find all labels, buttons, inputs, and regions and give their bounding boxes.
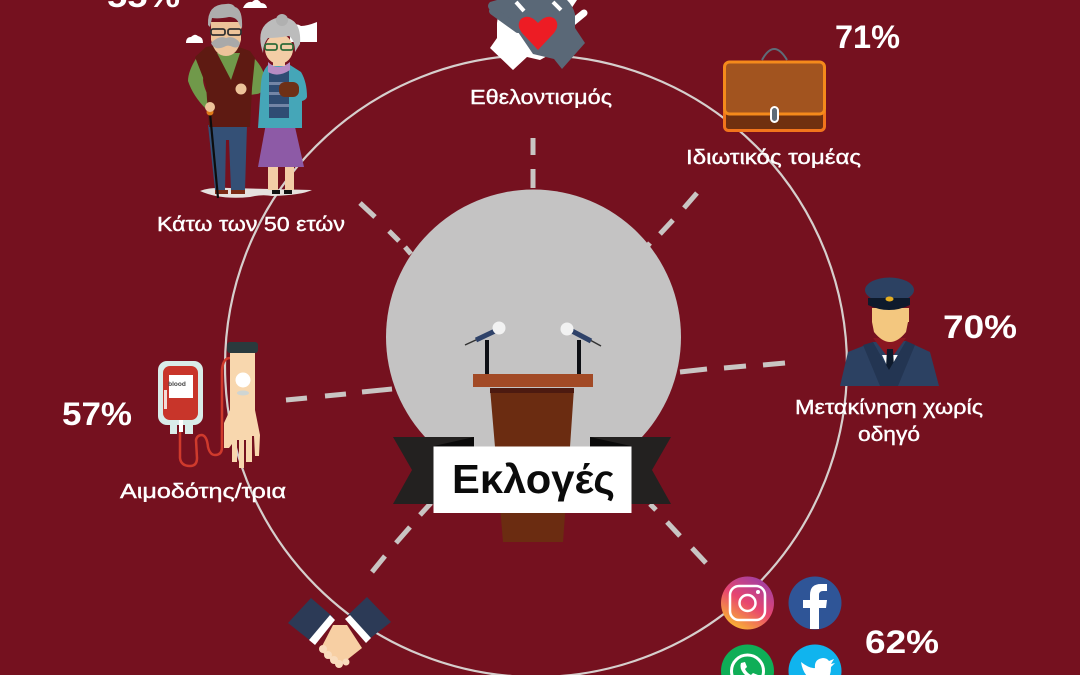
label: Μετακίνηση χωρίς: [795, 397, 983, 419]
icon: right sleeve: [348, 597, 391, 640]
label: Εθελοντισμός: [470, 87, 612, 109]
green arms: [188, 57, 214, 109]
face: [273, 55, 285, 66]
icon: arm: [224, 342, 260, 468]
item: private sector: [686, 19, 900, 169]
percentage: 71%: [835, 19, 900, 55]
right microphone: [560, 322, 601, 374]
label: Αιμοδότης/τρια: [120, 481, 286, 503]
icon: instagram: [721, 576, 774, 630]
icon: briefcase: [724, 49, 824, 130]
title: Εκλογές: [452, 456, 615, 502]
icon: whatsapp: [721, 644, 774, 675]
skirt: [258, 118, 304, 167]
central grey circle: [386, 190, 681, 484]
icon: elderly woman: [258, 14, 307, 194]
cardigan: [258, 65, 307, 128]
icon: heart: [519, 17, 557, 50]
icon: chauffeur: [840, 278, 939, 386]
percentage: 62%: [865, 624, 939, 660]
icon: tube: [180, 358, 245, 466]
item: driverless mobility: [795, 278, 1017, 446]
left microphone: [465, 322, 506, 374]
icon: blood bag: blood: [168, 381, 186, 388]
icon: ground shadow: [200, 188, 312, 198]
icon: white hand: [490, 0, 577, 70]
item: volunteering: [470, 0, 612, 109]
podium with microphones: [465, 322, 601, 542]
spoke dashes: [286, 138, 785, 572]
label: Κάτω των 50 ετών: [157, 214, 345, 236]
icon: left sleeve: [288, 598, 333, 642]
item: under 50: [107, 0, 345, 236]
icon: grey hand: [488, 0, 585, 69]
outer ring: [225, 55, 847, 675]
icon: blood bag: [158, 361, 203, 434]
podium body: [490, 388, 574, 542]
title ribbon: [393, 437, 671, 513]
face: [211, 22, 241, 56]
vest: [195, 44, 255, 127]
label: Ιδιωτικός τομέας: [686, 147, 861, 169]
icon: clouds: [186, 0, 317, 43]
icon: twitter: [788, 644, 842, 675]
item: blood donor: [62, 342, 286, 503]
cane: [210, 113, 218, 198]
item: social media: [721, 576, 939, 675]
podium top: [473, 374, 593, 387]
icon: facebook: [788, 576, 842, 630]
icon: hands: [320, 625, 362, 667]
label: [795, 397, 983, 446]
percentage: 57%: [62, 396, 132, 432]
label: οδηγό: [858, 424, 920, 446]
percentage: 70%: [943, 309, 1017, 345]
item: handshake: [288, 597, 391, 668]
icon: elderly man: [188, 4, 265, 198]
trousers: [208, 125, 247, 190]
